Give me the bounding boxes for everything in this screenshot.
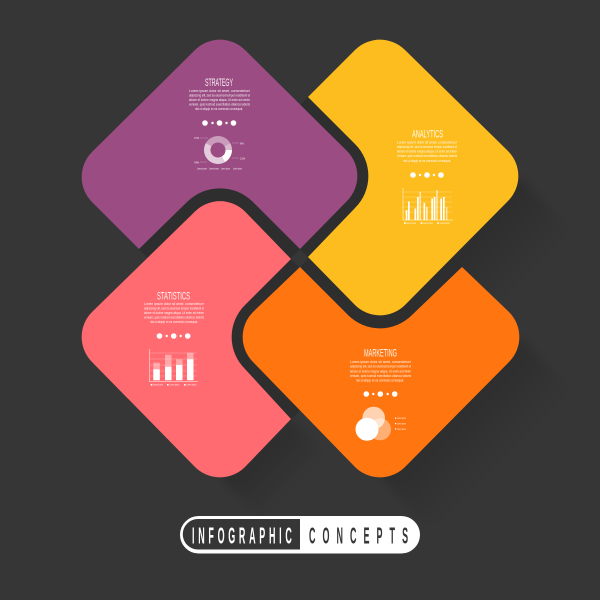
analytics text block: adipiscing elit, sed do eiusmod tempor incididunt ut (397, 144, 458, 149)
strategy dots (202, 120, 236, 126)
statistics heading: STATISTICS (157, 290, 190, 302)
donut labels: Lorem ipsum (221, 166, 230, 170)
donut labels: Lorem ipsum (233, 166, 242, 170)
analytics text block: veniam, quis nostrud exercitation ullamco laboris (397, 153, 457, 158)
venn legend: Lorem ipsum (397, 416, 406, 420)
strategy text block: labore et dolore magna aliqua. Ut enim ad minim (189, 97, 250, 102)
venn diagram (356, 407, 391, 441)
analytics dots (410, 172, 444, 178)
analytics text block (397, 140, 458, 163)
marketing text block: veniam, quis nostrud exercitation ullamco laboris (350, 373, 411, 378)
banner text: concepts: CONCEPTS (309, 522, 408, 549)
long shadow: orange panel (380, 337, 579, 537)
statistics bar chart: Lorem ipsum (153, 383, 163, 387)
venn legend (395, 416, 406, 431)
analytics bar chart: Lorem ipsum (406, 221, 416, 225)
marketing shape (243, 267, 519, 477)
donut labels (194, 136, 246, 170)
marketing text block: nisi ut aliquip ex ea commodo consequat. (356, 378, 404, 383)
analytics bar chart: Lorem ipsum (423, 221, 433, 225)
statistics text block: Lorem ipsum dolor sit amet, consectetuer (144, 301, 205, 306)
statistics text block (144, 301, 205, 324)
banner pill (180, 516, 420, 554)
statistics text block: veniam, quis nostrud exercitation ullamco laboris (144, 314, 204, 320)
donut labels: 21% (240, 156, 246, 160)
strategy text block: Lorem ipsum dolor sit amet, consectetuer (189, 88, 251, 93)
banner dark segment (183, 519, 300, 550)
panel: strategy (82, 40, 357, 249)
strategy text block: adipiscing elit, sed do eiusmod tempor incididunt ut (189, 92, 251, 98)
panel: marketing (243, 267, 519, 477)
strategy text block: veniam, quis nostrud exercitation ullamco laboris (189, 102, 250, 106)
marketing dots (364, 391, 398, 397)
statistics text block: adipiscing elit, sed do eiusmod tempor incididunt ut (144, 306, 205, 310)
analytics text block: labore et dolore magna aliqua. Ut enim ad minim (397, 148, 457, 154)
marketing heading: MARKETING (364, 348, 397, 360)
analytics bar chart (403, 188, 453, 225)
donut labels: 34% (194, 160, 200, 164)
venn legend: Lorem ipsum (397, 422, 406, 426)
strategy shape (82, 40, 357, 249)
marketing text block: Lorem ipsum dolor sit amet, consectetuer (350, 359, 412, 364)
separator bands (139, 97, 462, 419)
statistics bar chart (149, 349, 198, 387)
statistics bar chart: Lorem ipsum (170, 383, 180, 387)
title banner (180, 516, 420, 554)
statistics bar chart: Lorem ipsum (186, 383, 196, 387)
donut labels: Lorem ipsum (197, 166, 207, 170)
marketing text block (350, 359, 412, 383)
statistics text block: nisi ut aliquip ex ea commodo consequat. (150, 319, 198, 324)
venn legend: Lorem ipsum (397, 427, 406, 431)
analytics text block: nisi ut aliquip ex ea commodo consequat. (403, 158, 451, 163)
panel: statistics (82, 201, 291, 477)
analytics text block: Lorem ipsum dolor sit amet, consectetuer (397, 140, 458, 144)
long shadow: yellow panel (398, 176, 585, 372)
donut chart (203, 135, 233, 165)
statistics shape (82, 201, 291, 477)
banner text: infographic: INFOGRAPHIC (192, 522, 292, 549)
long shadow: pink panel (220, 419, 336, 522)
analytics shape (308, 40, 518, 315)
strategy text block: nisi ut aliquip ex ea commodo consequat. (195, 106, 243, 111)
statistics text block: labore et dolore magna aliqua. Ut enim ad minim (144, 310, 204, 315)
donut labels: Lorem ipsum (209, 166, 219, 170)
statistics dots (157, 333, 190, 339)
marketing text block: adipiscing elit, sed do eiusmod tempor incididunt ut (350, 364, 412, 369)
panel: analytics (308, 40, 518, 315)
panel: strategy: STRATEGY (205, 77, 233, 89)
strategy text block (189, 88, 251, 111)
analytics bar chart: Lorem ipsum (440, 221, 450, 225)
donut labels: 8% (240, 142, 244, 146)
marketing text block: labore et dolore magna aliqua. Ut enim ad minim (350, 368, 411, 373)
donut labels: 37% (194, 136, 200, 140)
analytics heading: ANALYTICS (412, 128, 443, 140)
